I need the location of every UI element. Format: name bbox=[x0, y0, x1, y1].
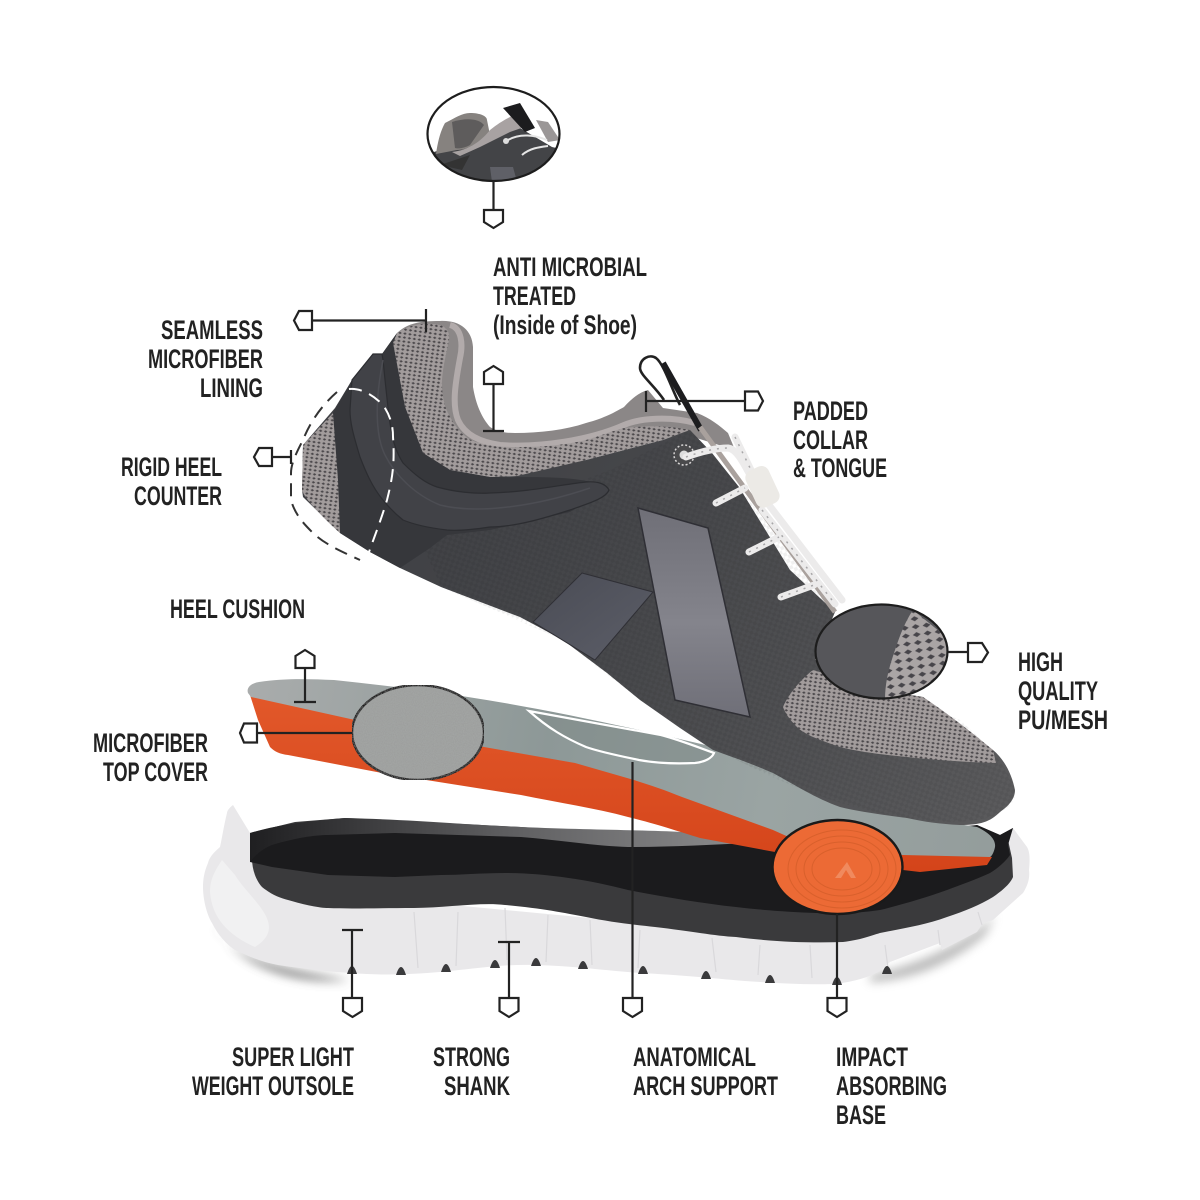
callout: rigid heel counter bbox=[121, 448, 291, 511]
black footbed bbox=[250, 825, 1013, 913]
text: HIGH bbox=[1018, 647, 1063, 677]
logo wedge bbox=[533, 573, 653, 660]
leader bbox=[342, 930, 363, 998]
callout: strong shank: SHANK bbox=[444, 1071, 510, 1101]
fabric swatch bbox=[352, 685, 484, 780]
sidewall highlight bbox=[210, 860, 269, 947]
text: PADDED bbox=[793, 396, 868, 426]
callout: impact absorbing base: ABSORBING bbox=[836, 1071, 947, 1101]
callout: seamless microfiber lining: LINING bbox=[200, 373, 263, 403]
lining mesh bbox=[393, 324, 690, 477]
ground shadow right bbox=[870, 915, 995, 982]
logo bar bbox=[638, 508, 750, 717]
callout: seamless microfiber lining bbox=[148, 309, 426, 403]
shoe body bbox=[302, 333, 1015, 825]
callout: impact absorbing base: BASE bbox=[836, 1100, 886, 1130]
text: MICROFIBER bbox=[93, 728, 208, 758]
tag bbox=[294, 311, 312, 330]
callout: heel cushion bbox=[170, 594, 316, 702]
pull loop bbox=[640, 356, 680, 405]
insole top surface bbox=[248, 679, 995, 860]
collar foam bbox=[397, 321, 735, 450]
callout: high quality PU/mesh bbox=[948, 643, 1108, 735]
ground shadow left bbox=[214, 925, 350, 981]
footbed back wall bbox=[250, 818, 760, 862]
toggle bbox=[743, 463, 782, 510]
callout: high quality PU/mesh: PU/MESH bbox=[1018, 705, 1108, 735]
circle image bbox=[434, 103, 558, 180]
tag bbox=[254, 448, 272, 466]
callout: strong shank bbox=[433, 942, 520, 1101]
callout: super light weight outsole: WEIGHT OUTSOLE bbox=[192, 1071, 354, 1101]
circle border bbox=[428, 87, 560, 181]
laces and pull tab bbox=[640, 356, 842, 612]
text: SEAMLESS bbox=[161, 315, 263, 345]
shoe upper bbox=[302, 321, 1015, 825]
leader bbox=[257, 732, 352, 734]
band contour bbox=[377, 360, 590, 509]
callout: super light weight outsole bbox=[192, 930, 363, 1101]
disc logo bbox=[835, 862, 856, 878]
callout: anti microbial treated: TREATED bbox=[493, 281, 576, 311]
tag bbox=[968, 643, 988, 662]
text: ANATOMICAL bbox=[633, 1042, 756, 1072]
tag bbox=[240, 724, 257, 742]
white outsole bbox=[203, 805, 1030, 984]
lace flecks bbox=[686, 437, 835, 604]
callout: microfiber top cover: TOP COVER bbox=[103, 757, 208, 787]
detail circle: microfiber top cover bbox=[352, 685, 484, 780]
callout: padded collar and tongue bbox=[646, 391, 887, 483]
tread notches bbox=[347, 958, 892, 985]
outsole groove lines bbox=[414, 908, 982, 978]
callout: anatomical arch support bbox=[623, 762, 778, 1101]
leader bbox=[631, 762, 634, 998]
swatch mesh bbox=[885, 610, 950, 700]
inner dash bbox=[349, 389, 394, 552]
callout: padded collar and tongue: COLLAR bbox=[793, 425, 868, 455]
swatch border bbox=[816, 604, 948, 698]
tag bbox=[828, 998, 846, 1017]
tag bbox=[745, 392, 763, 410]
callout: seamless microfiber lining: MICROFIBER bbox=[148, 344, 263, 374]
text: ANTI MICROBIAL bbox=[493, 252, 647, 282]
leader bbox=[294, 668, 316, 702]
toe mesh panel bbox=[783, 670, 996, 763]
callout: anti microbial treated bbox=[483, 181, 647, 431]
callout: high quality PU/mesh: QUALITY bbox=[1018, 676, 1098, 706]
detail circle: impact absorbing base bbox=[772, 820, 902, 914]
leader inside bbox=[483, 383, 504, 431]
text: RIGID HEEL bbox=[121, 452, 222, 482]
tag bbox=[343, 998, 362, 1017]
callout: impact absorbing base bbox=[828, 914, 947, 1130]
collar piping bbox=[450, 325, 695, 446]
text: STRONG bbox=[433, 1042, 510, 1072]
dashed heel counter outline bbox=[291, 389, 394, 560]
tag bbox=[500, 998, 518, 1017]
callout: rigid heel counter: COUNTER bbox=[134, 481, 222, 511]
callout: anatomical arch support: ARCH SUPPORT bbox=[633, 1071, 778, 1101]
insole assembly bbox=[248, 679, 995, 872]
dark rim bbox=[233, 805, 1013, 942]
dark heel rubber bbox=[333, 333, 609, 568]
leader bbox=[948, 651, 968, 653]
tag bbox=[623, 998, 642, 1017]
text: SUPER LIGHT bbox=[232, 1042, 354, 1072]
body texture bbox=[420, 430, 1015, 822]
lace cords bbox=[686, 437, 842, 604]
leader bbox=[646, 391, 745, 412]
swatch base bbox=[816, 604, 948, 698]
leader top bbox=[492, 181, 495, 210]
insole orange foam side bbox=[250, 695, 992, 872]
lace facing edge bbox=[700, 427, 835, 612]
orange disc bbox=[772, 820, 902, 914]
callout: anti microbial treated: (Inside of Shoe) bbox=[493, 310, 637, 340]
leader bbox=[272, 450, 291, 464]
disc rings bbox=[788, 830, 896, 908]
tag inside bbox=[484, 366, 503, 384]
outsole assembly bbox=[203, 805, 1030, 985]
detail circle: PU/mesh bbox=[816, 604, 950, 700]
outer dash bbox=[291, 392, 360, 560]
detail circle: anti microbial bbox=[425, 85, 565, 185]
leader bbox=[836, 914, 838, 998]
leader bbox=[312, 309, 426, 332]
eyelet bbox=[674, 445, 694, 465]
arch support outline bbox=[529, 711, 714, 763]
text: IMPACT bbox=[836, 1042, 908, 1072]
callout: padded collar and tongue: & TONGUE bbox=[793, 453, 887, 483]
black strap bbox=[663, 363, 701, 430]
leader bbox=[498, 942, 520, 998]
text: HEEL CUSHION bbox=[170, 594, 305, 624]
tag bbox=[296, 650, 314, 668]
tag top bbox=[484, 210, 503, 228]
heel mesh panel bbox=[302, 413, 340, 533]
raised heel band bbox=[350, 354, 609, 530]
eyelet hole bbox=[680, 450, 688, 460]
callout: microfiber top cover bbox=[93, 724, 352, 787]
